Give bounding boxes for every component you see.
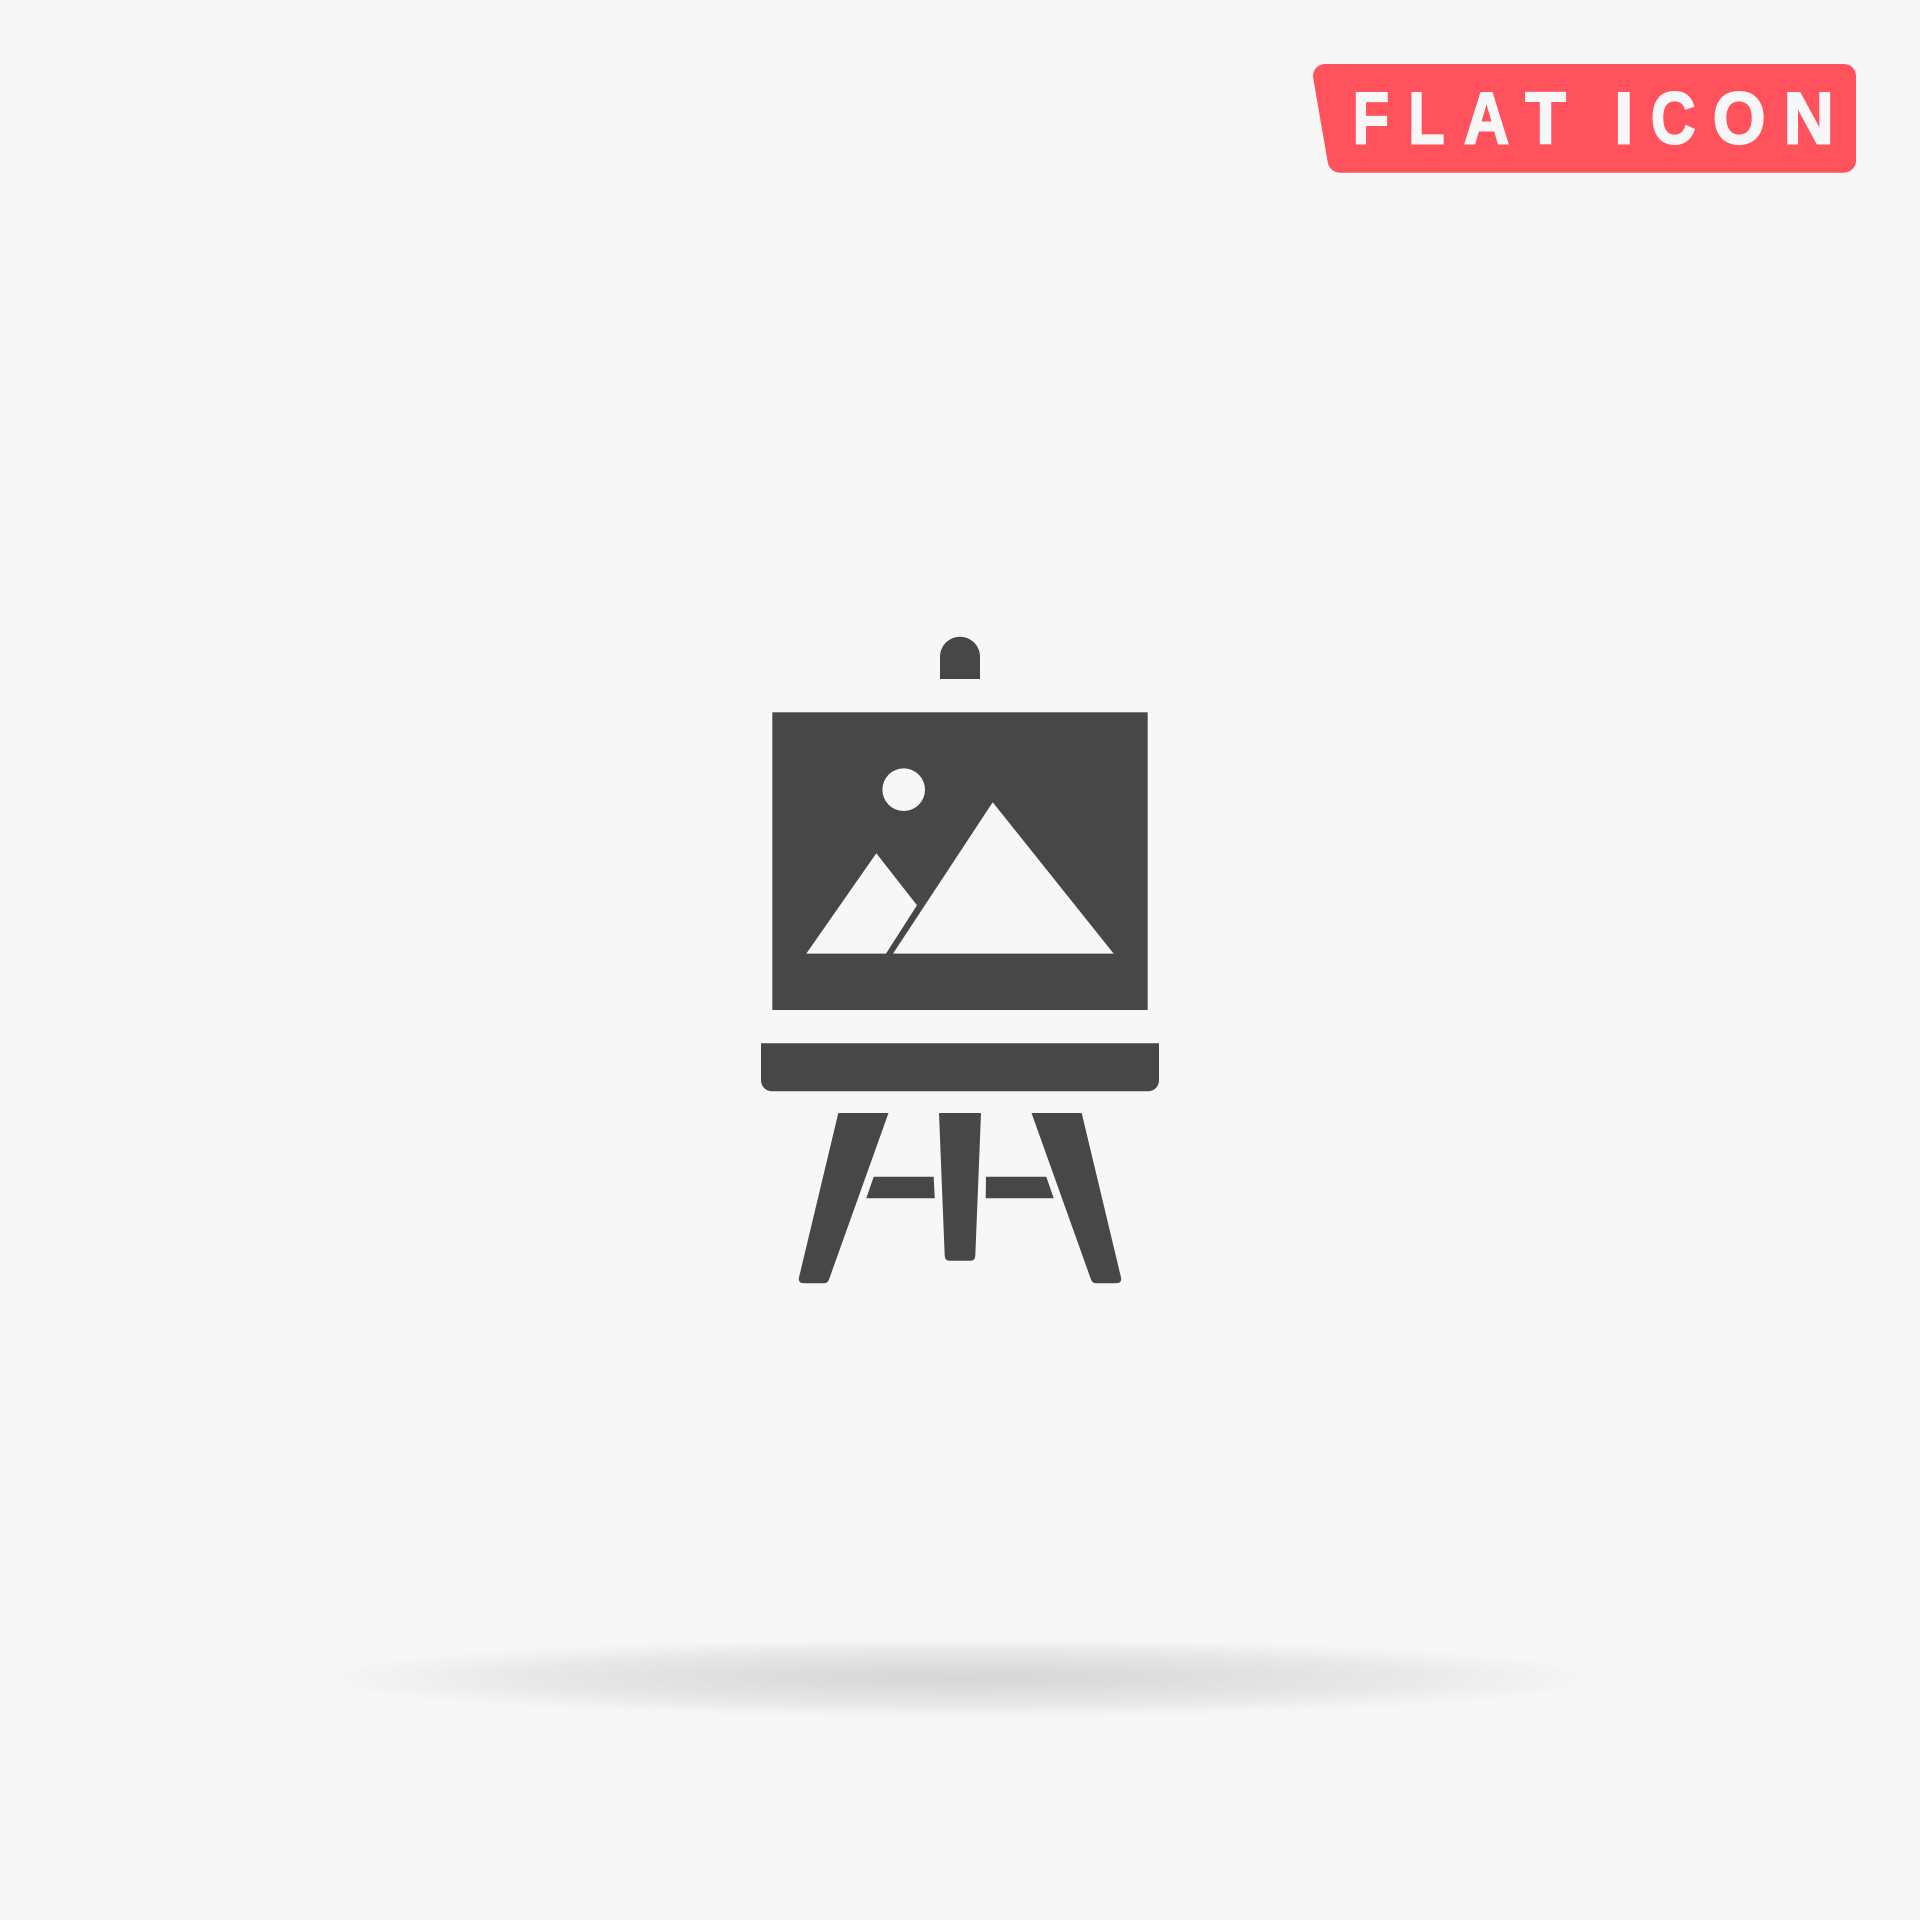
- left crossbar: [866, 1177, 935, 1198]
- badge text: T: [1525, 78, 1566, 159]
- easel shelf: [761, 1043, 1159, 1091]
- painting: sun: [882, 768, 925, 811]
- badge text: A: [1464, 78, 1509, 159]
- badge text: I: [1614, 78, 1633, 159]
- badge text: F: [1353, 78, 1389, 159]
- badge text: N: [1784, 78, 1834, 159]
- badge text: L: [1408, 78, 1445, 159]
- right crossbar: [986, 1177, 1054, 1198]
- right leg: [1032, 1113, 1121, 1283]
- canvas: [772, 712, 1148, 1010]
- left leg: [799, 1113, 888, 1283]
- ground shadow: [317, 1638, 1607, 1718]
- icon: easel: [761, 637, 1159, 1283]
- badge text: C: [1651, 78, 1696, 159]
- painting: large mountain: [893, 802, 1114, 954]
- badge text: O: [1713, 78, 1766, 159]
- center leg: [939, 1113, 981, 1261]
- badge background: [1313, 64, 1856, 173]
- easel top knob: [940, 637, 980, 679]
- painting: small mountain: [806, 853, 917, 954]
- badge: flat icon label: [1313, 64, 1856, 173]
